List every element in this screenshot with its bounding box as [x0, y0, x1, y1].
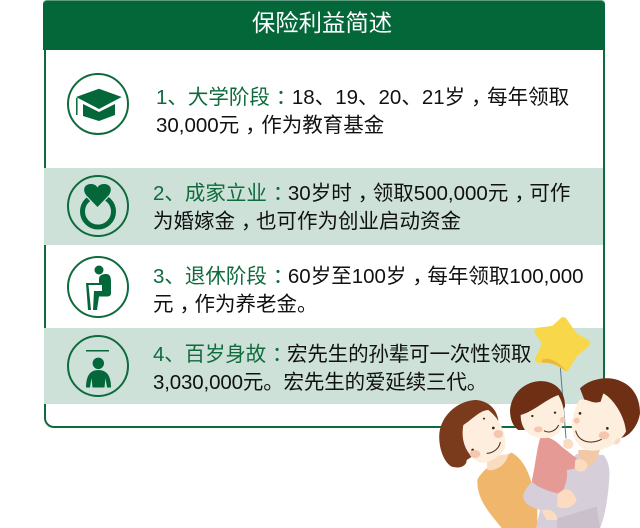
text: item 2: ， [514, 182, 535, 205]
text: item 2: 2、成家立业 30岁时 领取500,000元 可作 [153, 182, 570, 205]
icon: person with halo line [67, 335, 129, 397]
star balloon [538, 321, 587, 438]
text: item 3: 元 作为养老金。 [153, 292, 318, 316]
icon: graduation cap [67, 73, 129, 135]
text: item 2: 为婚嫁金 也可作为创业启动资金 [153, 210, 461, 232]
text: item 1 [156, 86, 569, 136]
illustration: family with star balloon [439, 317, 640, 528]
text: item 4: 4、百岁身故 宏先生的孙辈可一次性领取 [153, 343, 531, 366]
text: item 3: ： [273, 265, 293, 288]
panel frame [44, 40, 605, 428]
text: item 1: ， [471, 86, 492, 109]
text: item 3 [153, 265, 584, 316]
row band 2 [44, 168, 603, 245]
row band 4 [44, 328, 603, 404]
text: item 3: 3、退休阶段 60岁至100岁 每年领取100,000 [153, 265, 584, 288]
icon: seated elder [67, 256, 129, 318]
text: item 1: ， [245, 114, 266, 136]
title bar [43, 0, 605, 50]
text: item 4: 3,030,000元。宏先生的爱延续三代。 [153, 370, 487, 394]
text: item 2: ： [273, 182, 293, 205]
text: item 1: 1、大学阶段 18、19、20、21岁 每年领取 [156, 86, 569, 109]
child [510, 381, 587, 520]
text: item 4 [153, 343, 531, 394]
text: item 2: ， [358, 182, 378, 205]
text: item 2: ， [241, 210, 262, 232]
title: 保险利益简述 [252, 10, 392, 36]
man [523, 378, 640, 528]
text: item 3: ， [412, 265, 433, 288]
text: item 3: ， [180, 292, 200, 316]
text: item 1: ： [276, 86, 296, 109]
woman [439, 400, 537, 528]
text: item 2 [153, 182, 570, 232]
text: item 4: ： [272, 343, 292, 366]
icon: heart ring [67, 175, 129, 237]
text: item 1: 30,000元 作为教育基金 [156, 114, 384, 136]
